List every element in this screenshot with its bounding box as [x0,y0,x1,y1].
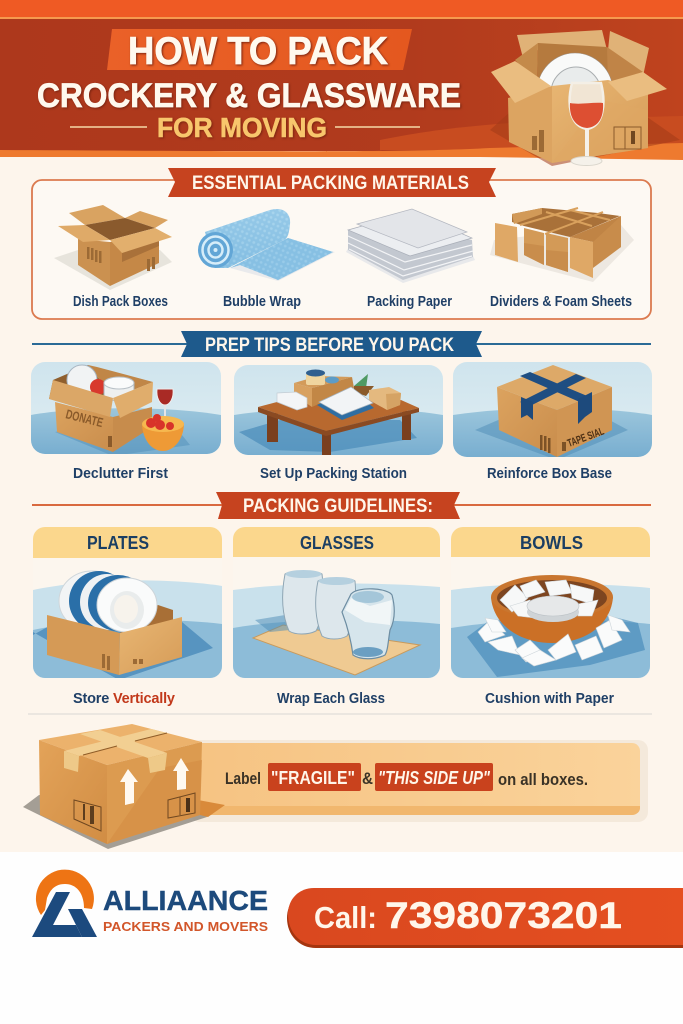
tag: fragile: "FRAGILE" [271,767,355,788]
call pill [287,888,683,948]
label: Wrap Each Glass [277,691,385,707]
panel: prep tips [31,331,652,482]
heading ribbon [32,492,651,519]
logo tagline: PACKERS AND MOVERS [103,919,268,934]
footer [0,852,683,1024]
title: how to pack: HOW TO PACK [128,30,388,73]
label: Bubble Wrap [223,294,301,310]
heading ribbon: PREP TIPS BEFORE YOU PACK [205,335,454,356]
label: Store Vertically [73,691,175,707]
card: declutter first: DONATE [64,406,105,430]
callout: label fragile [23,724,648,849]
icon: bubble wrap roll [198,209,335,281]
call text: Call: [314,900,377,935]
label: Set Up Packing Station [260,466,407,482]
title banner [107,29,412,70]
label: Cushion with Paper [485,691,614,707]
label: Dividers & Foam Sheets [490,294,632,310]
heading ribbon: ESSENTIAL PACKING MATERIALS [192,173,469,194]
tag: this side up: "THIS SIDE UP" [378,767,490,788]
heading ribbon [168,168,496,197]
logo wordmark: ALLIAANCE [103,885,268,916]
callout text end: on all boxes. [498,770,588,789]
logo mark [32,870,97,937]
title: for moving: FOR MOVING [157,112,327,143]
card: reinforce box base [453,362,652,460]
panel: essential packing materials [32,168,651,319]
label: Declutter First [73,466,168,482]
card: bowls [451,527,650,678]
icon: hero box with plate and wine glass [490,30,680,166]
callout text: Label [225,769,261,788]
phone number: 7398073201 [385,894,622,936]
card: reinforce box base: TAPE SIAL [566,425,606,450]
label: Packing Paper [367,294,452,310]
header band [0,0,683,160]
tag: this side up [375,763,493,791]
icon: cardboard dividers [490,208,634,282]
heading: BOWLS [520,533,583,553]
tag: fragile [268,763,361,791]
title flourish lines [70,126,420,128]
heading ribbon [32,331,651,357]
heading ribbon: PACKING GUIDELINES: [243,496,433,517]
title: crockery and glassware: CROCKERY & GLASSWARE [37,77,461,115]
icon: packing paper stack [346,209,475,283]
card: declutter first [31,362,221,456]
panel: packing guidelines [32,492,651,707]
card: glasses [233,527,440,678]
label: Reinforce Box Base [487,466,612,482]
card: plates [33,527,222,680]
callout bar [190,740,648,822]
icon: sealed box with arrows [23,724,225,849]
heading: GLASSES [300,533,374,553]
label: Dish Pack Boxes [73,294,168,310]
card: set up packing station [234,365,443,455]
icon: dish pack box [54,205,172,290]
heading: PLATES [87,533,149,553]
ampersand: & [362,769,373,788]
